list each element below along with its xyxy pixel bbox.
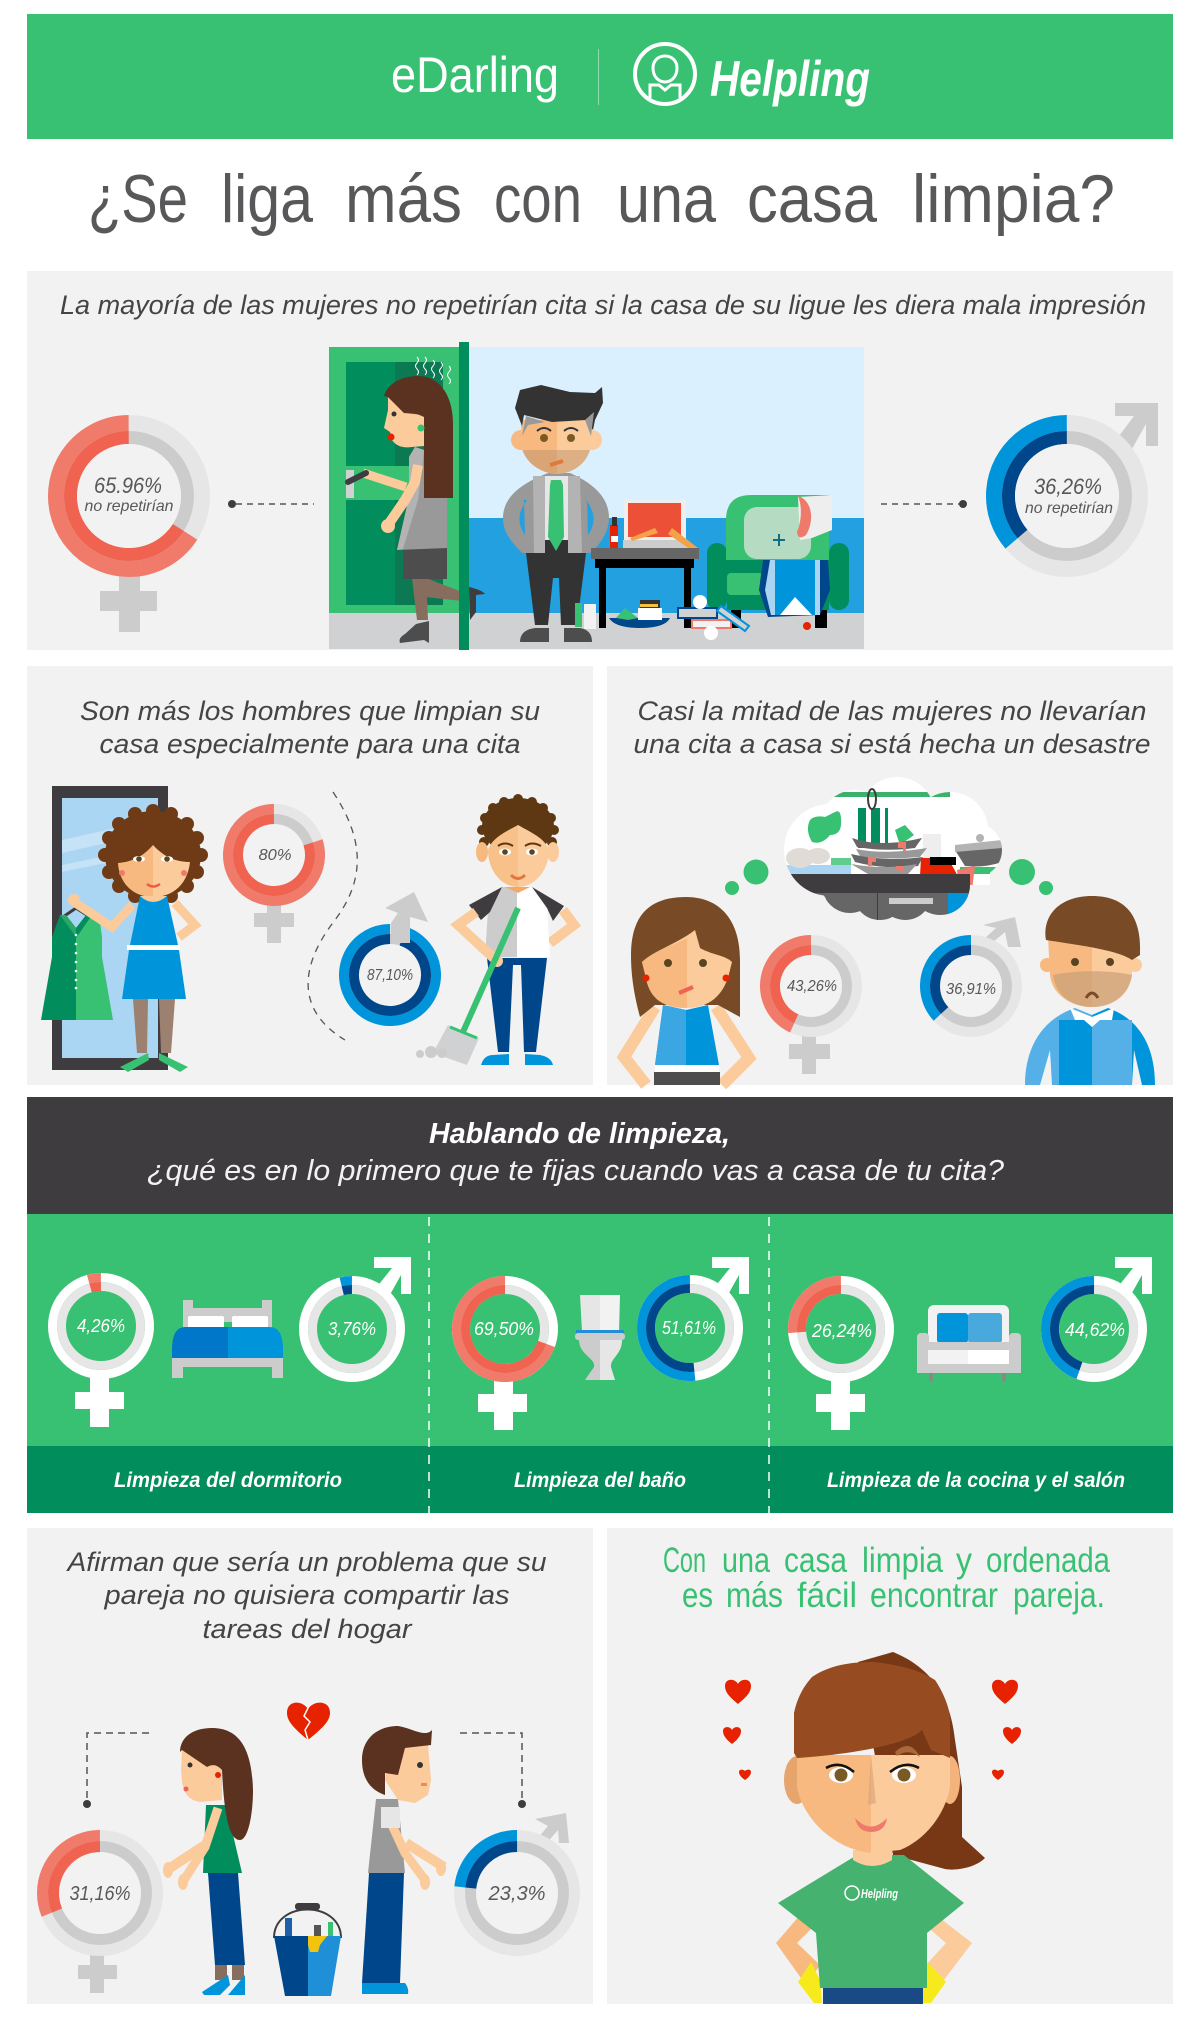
heading: casa especialmente para una cita <box>100 729 520 759</box>
man sad <box>1025 896 1155 1085</box>
panel: mala impresión <box>27 271 1173 650</box>
banner heading: Hablando de limpieza, <box>429 1118 730 1150</box>
man with broom <box>416 794 574 1065</box>
armchair <box>707 495 849 628</box>
chart: female salón 26,24%: 26,24% <box>811 1321 872 1341</box>
logo: Helpling icon <box>635 44 695 104</box>
panel: limpieza results <box>27 1214 1173 1513</box>
closing message: Con <box>663 1541 706 1580</box>
chart: male dormitorio 3,76%: 3,76% <box>328 1319 376 1339</box>
door post <box>459 342 469 650</box>
chart: male baño 51,61%: 51,61% <box>662 1318 716 1338</box>
icon: armchair <box>917 1305 1021 1381</box>
chart: male 36.26%: 36,26% <box>1034 474 1102 499</box>
chart: female salón 26,24% <box>789 1277 893 1430</box>
chart: male 36.26% <box>964 393 1170 599</box>
chart: male salón 44,62% <box>1032 1257 1156 1391</box>
panel: con una casa limpia <box>607 1528 1173 2004</box>
chart: female 65.96%: 65.96% <box>94 473 162 498</box>
connector left <box>228 500 314 508</box>
chart: female 31,16%: 31,16% <box>70 1883 130 1905</box>
chart: male 36.26%: no repetirían <box>1025 500 1113 517</box>
chart: female baño 69,50% <box>443 1267 567 1430</box>
heading: tareas del hogar <box>202 1614 413 1644</box>
chart: female 65.96%: no repetirían <box>84 498 174 515</box>
heading <box>65 1547 546 1644</box>
label band: Limpieza del baño <box>514 1469 686 1492</box>
closing message <box>663 1541 1110 1615</box>
title: limpia? <box>912 161 1115 237</box>
dark question banner <box>27 1097 1173 1214</box>
icon: cleaning bucket <box>274 1903 341 1996</box>
dashed curve <box>308 792 357 1040</box>
illustration: dirty apartment scene <box>329 342 864 650</box>
chart: female 43,26% <box>750 925 872 1074</box>
panel: tareas del hogar <box>25 1528 593 2004</box>
title: liga <box>221 161 313 237</box>
chart: male salón 44,62%: 44,62% <box>1065 1320 1125 1340</box>
label band <box>27 1446 1173 1513</box>
closing message: es <box>682 1576 713 1615</box>
closing message: y <box>956 1541 972 1580</box>
chart: male 36,91%: 36,91% <box>946 981 996 998</box>
chart: female dormitorio 4,26%: 4,26% <box>77 1316 125 1336</box>
closing message: limpia <box>862 1541 943 1580</box>
header banner <box>27 14 1173 139</box>
heading: Son más los hombres que limpian su <box>80 696 540 726</box>
icon: broken heart <box>287 1703 330 1740</box>
hearts <box>723 1680 1021 1780</box>
logo: Helpling: Helpling <box>710 51 870 107</box>
chart: female 80% <box>216 797 332 943</box>
thought bubbles <box>725 859 1053 895</box>
chart: male dormitorio 3,76% <box>293 1257 411 1388</box>
heading <box>634 696 1150 759</box>
chart: female 43,26%: 43,26% <box>787 978 837 995</box>
man turned away <box>362 1726 446 1994</box>
hanging dress <box>41 908 113 1020</box>
closing message: ordenada <box>986 1541 1110 1580</box>
heading: Afirman que sería un problema que su <box>65 1547 546 1577</box>
panel: mujeres desastre <box>607 666 1173 1085</box>
woman turned away <box>163 1728 253 1995</box>
closing message: más <box>726 1576 783 1615</box>
heading: Casi la mitad de las mujeres no llevarían <box>638 696 1146 726</box>
chart: male 23,3% <box>454 1813 580 1956</box>
chart: female dormitorio 4,26% <box>41 1266 161 1427</box>
shirt logo <box>845 1886 898 1901</box>
closing message: fácil <box>797 1576 857 1615</box>
label band: Limpieza de la cocina y el salón <box>827 1469 1125 1492</box>
chart: female 65.96% <box>28 395 230 632</box>
title: casa <box>747 161 877 237</box>
shirt logo: Helpling <box>861 1886 898 1901</box>
closing message: una <box>722 1541 770 1580</box>
icon: bed <box>172 1300 283 1378</box>
title: una <box>617 161 716 237</box>
heading: La mayoría de las mujeres no repetirían cita si la casa de su ligue les diera mala impresión <box>60 290 1146 320</box>
chart: male baño 51,61% <box>637 1257 749 1381</box>
closing message: casa <box>784 1541 847 1580</box>
title: más <box>345 161 462 237</box>
floor mess <box>575 595 811 640</box>
closing message: pareja. <box>1013 1576 1105 1615</box>
label band: Limpieza del dormitorio <box>114 1469 342 1492</box>
title: con <box>494 161 582 237</box>
connector left <box>83 1733 149 1808</box>
chart: female 80%: 80% <box>258 847 292 864</box>
man in suit <box>503 385 609 642</box>
chart: male 36,91% <box>906 917 1036 1051</box>
mirror <box>52 786 168 1070</box>
closing message: encontrar <box>870 1576 998 1615</box>
woman with curls <box>68 804 208 1072</box>
chart: male 87,10% <box>332 892 448 1033</box>
table with pizza <box>591 499 699 628</box>
heading: una cita a casa si está hecha un desastre <box>634 729 1150 759</box>
woman upset <box>624 897 749 1085</box>
thought cloud: messy kitchen <box>780 775 1005 922</box>
woman leaving <box>348 376 485 643</box>
heading: pareja no quisiera compartir las <box>103 1580 510 1610</box>
banner question: ¿qué es en lo primero que te fijas cuando vas a casa de tu cita? <box>147 1155 1005 1187</box>
chart: male 87,10%: 87,10% <box>367 967 413 984</box>
logo: eDarling: eDarling <box>391 47 559 103</box>
woman smiling with Helpling shirt <box>776 1652 985 2004</box>
heading <box>80 696 540 759</box>
chart: female 31,16% <box>25 1818 175 1993</box>
chart: female baño 69,50%: 69,50% <box>474 1319 534 1339</box>
connector right <box>881 500 967 508</box>
title: ¿Se <box>88 161 188 237</box>
icon: toilet <box>575 1295 625 1380</box>
door <box>346 357 450 605</box>
chart: male 23,3%: 23,3% <box>487 1883 546 1905</box>
panel: hombres limpian <box>27 666 593 1085</box>
title <box>88 161 1115 237</box>
connector right <box>460 1733 526 1808</box>
